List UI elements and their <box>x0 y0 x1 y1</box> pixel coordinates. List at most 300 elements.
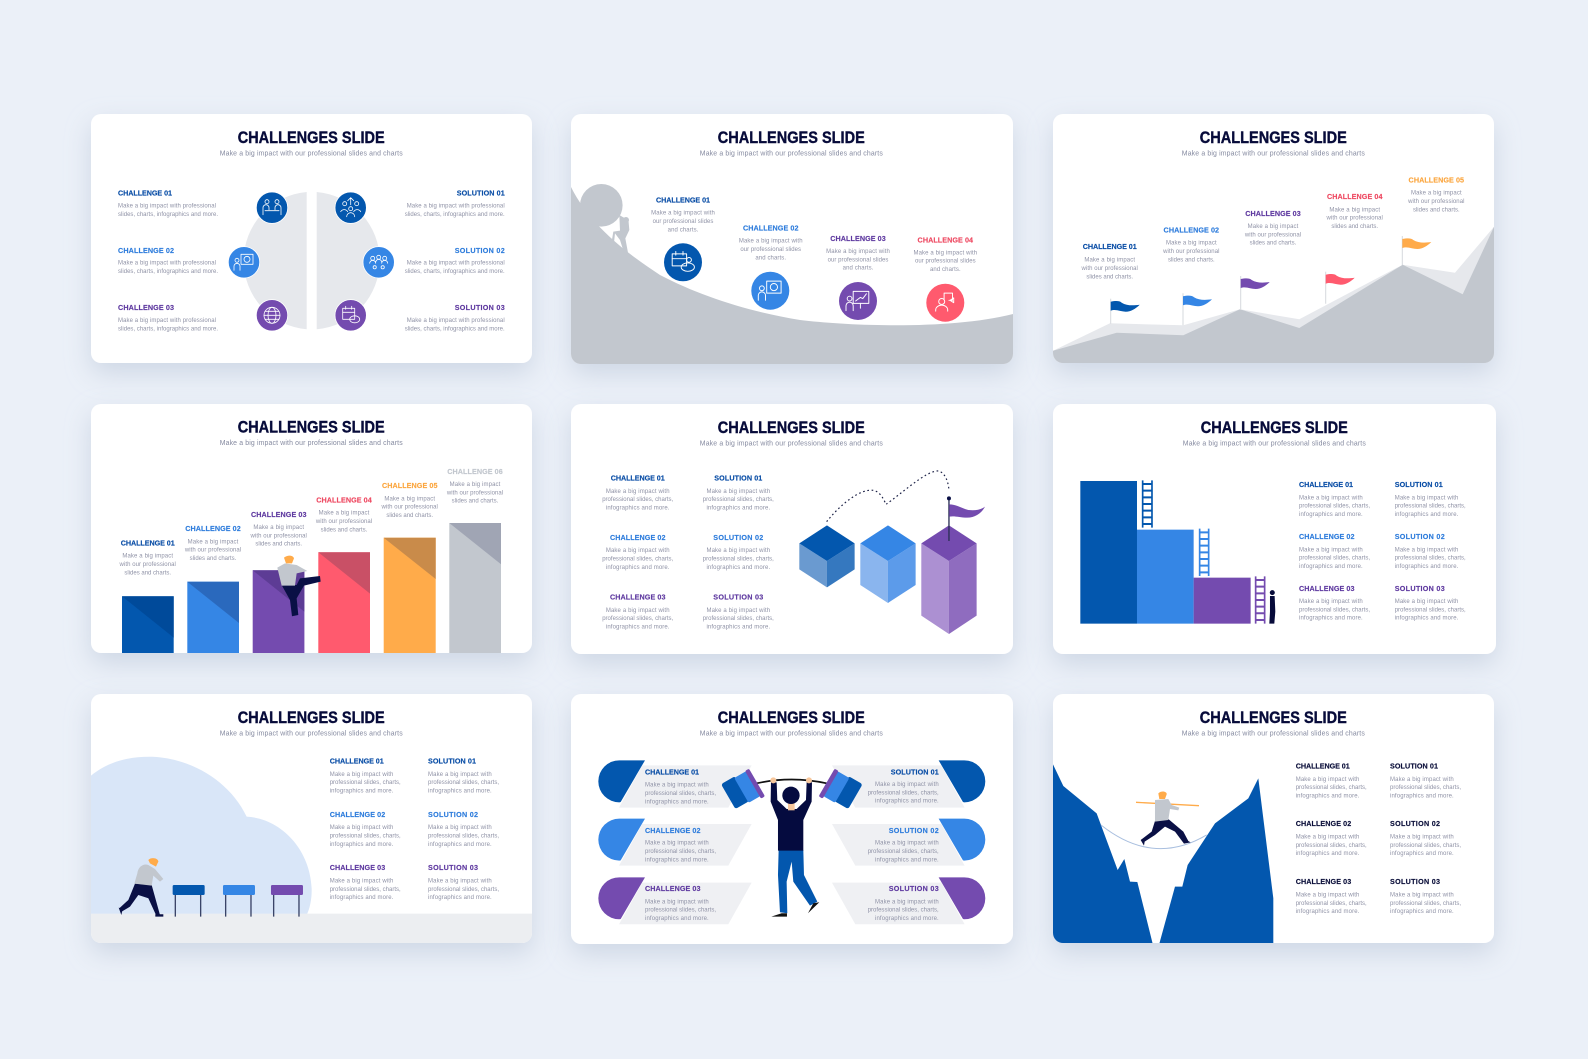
challenge 02 text: Make a big impact <box>1166 241 1217 247</box>
ladder 1 <box>1143 480 1152 528</box>
challenge 02 text: CHALLENGE 02 <box>330 810 385 819</box>
challenge 02 text <box>1296 819 1367 857</box>
solution 02 text: professional slides, charts, <box>868 849 939 855</box>
icon: partners <box>256 192 288 223</box>
challenge 03 text: Make a big impact <box>253 525 304 531</box>
grey ribbons <box>619 765 965 924</box>
blue badges <box>598 760 985 802</box>
solution 01 text: infographics and more. <box>1390 794 1454 800</box>
legs <box>778 850 817 913</box>
solution 02 text: SOLUTION 02 <box>1395 532 1445 541</box>
challenge 03 text: CHALLENGE 03 <box>330 863 385 872</box>
challenge 03 text: Make a big impact with professional <box>118 318 216 324</box>
challenge 01 text: CHALLENGE 01 <box>1296 761 1350 770</box>
solution 02 text <box>703 533 774 571</box>
challenge 02 text: professional slides, charts, <box>1296 843 1367 849</box>
challenge 01 text: slides, charts, infographics and more. <box>118 212 218 218</box>
solution 03 text: Make a big impact with <box>706 608 770 614</box>
challenge 03 text <box>1299 584 1370 622</box>
subtitle: Make a big impact with our professional slides and charts <box>1182 151 1365 158</box>
flag 5 <box>1402 236 1431 265</box>
barbell <box>721 769 863 809</box>
challenge 03 text: Make a big impact with <box>1299 599 1363 605</box>
hurdles scene <box>91 757 532 944</box>
solution 01 text: Make a big impact with <box>1390 777 1454 783</box>
solution 01 text: infographics and more. <box>428 788 492 794</box>
title: CHALLENGES SLIDE <box>1200 708 1347 727</box>
challenge 02 text: slides and charts. <box>190 556 237 562</box>
challenge 01 text: infographics and more. <box>645 799 709 805</box>
challenge 02 text <box>1162 226 1219 263</box>
solution 01 text: infographics and more. <box>1395 512 1459 518</box>
subtitle: Make a big impact with our professional slides and charts <box>220 731 403 738</box>
solution 02 text: Make a big impact with <box>875 841 939 847</box>
challenge 02 text: infographics and more. <box>1299 564 1363 570</box>
challenge 02 text: CHALLENGE 02 <box>1299 532 1354 541</box>
panel: slide 5 cubes <box>571 404 1013 654</box>
bar 2 <box>187 582 239 653</box>
solution 01 text: professional slides, charts, <box>703 497 774 503</box>
solution 01 text: professional slides, charts, <box>1390 785 1461 791</box>
title: CHALLENGES SLIDE <box>1201 418 1348 437</box>
challenge 01 text: Make a big impact with <box>330 772 393 778</box>
challenge 03 text <box>118 303 218 332</box>
solution 02 text: infographics and more. <box>1395 564 1459 570</box>
solution 01 text <box>868 768 939 805</box>
solution 01 text: professional slides, charts, <box>868 790 939 796</box>
challenge 03 text: professional slides, charts, <box>645 908 716 914</box>
split circle <box>244 192 380 329</box>
challenge 06 text: slides and charts. <box>452 499 499 505</box>
challenge 03 text: slides and charts. <box>255 542 302 548</box>
flag 2 <box>1183 293 1212 325</box>
challenge 03 text: professional slides, charts, <box>602 616 674 622</box>
challenge 05 text: with our professional <box>381 505 438 511</box>
solution 02 text <box>868 826 939 863</box>
solution 02 text: Make a big impact with <box>428 825 492 831</box>
challenge 04 text: slides and charts. <box>321 527 368 533</box>
icon: presenter with chart <box>839 282 877 320</box>
challenge 02 text: with our professional <box>1162 249 1219 255</box>
challenge 01 text: CHALLENGE 01 <box>1299 480 1353 489</box>
challenge 01 text: Make a big impact with <box>1296 777 1359 783</box>
solution 02 text: infographics and more. <box>875 857 939 863</box>
challenge 01 text: and charts. <box>668 227 699 233</box>
cube 3 <box>921 525 977 634</box>
challenge 03 text <box>602 592 674 630</box>
challenge 01 text: CHALLENGE 01 <box>656 196 710 205</box>
challenge 01 text: CHALLENGE 01 <box>645 767 699 776</box>
challenge 02 text: professional slides, charts, <box>330 834 401 840</box>
torso <box>771 782 812 851</box>
solution 03 text <box>1395 584 1466 622</box>
solution 02 text: SOLUTION 02 <box>428 810 478 819</box>
challenge 03 text: slides and charts. <box>1250 241 1297 247</box>
challenge 03 text <box>1244 209 1301 247</box>
bar 1 <box>122 596 174 653</box>
challenge 02 text: Make a big impact with <box>1299 547 1363 553</box>
challenge 01 text: professional slides, charts, <box>645 791 716 797</box>
challenge 01 text <box>1081 242 1138 280</box>
solution 02 text: professional slides, charts, <box>428 834 499 840</box>
icon: presentation <box>228 247 260 278</box>
challenge 02 text <box>645 826 716 863</box>
icon: presenter with clock <box>751 272 789 310</box>
challenge 04 text: our professional slides <box>915 259 976 265</box>
hurdle 1 <box>173 885 205 917</box>
solution 01 text: slides, charts, infographics and more. <box>405 212 505 218</box>
challenge 01 text: professional slides, charts, <box>1299 504 1370 510</box>
solution 03 text <box>405 303 505 332</box>
challenge 01 text: infographics and more. <box>606 506 670 512</box>
solution 03 text: SOLUTION 03 <box>428 863 478 872</box>
challenge 02 text: infographics and more. <box>1296 851 1360 857</box>
challenge 02 text: infographics and more. <box>330 842 394 848</box>
flag 4 <box>1326 272 1355 304</box>
solution 01 text: Make a big impact with <box>875 782 939 788</box>
panel: slide 7 hurdles <box>91 694 532 944</box>
panel: slide 8 weightlifter <box>571 694 1013 944</box>
challenge 01 text: slides and charts. <box>1086 274 1133 280</box>
solution 03 text: Make a big impact with <box>1395 599 1458 605</box>
solution 03 text: Make a big impact with <box>875 899 939 905</box>
challenge 02 text: Make a big impact <box>188 539 239 545</box>
challenge 03 text <box>1296 877 1367 915</box>
solution 01 text: SOLUTION 01 <box>1390 761 1438 770</box>
panel: slide 6 stairs and ladders <box>1053 404 1496 654</box>
challenge 01 text: Make a big impact with <box>606 489 670 495</box>
challenge 01 text: CHALLENGE 01 <box>118 189 172 198</box>
hurdle 2 <box>223 885 255 917</box>
solution 01 text: infographics and more. <box>706 506 770 512</box>
challenge 03 text: CHALLENGE 03 <box>1296 877 1351 886</box>
flag 1 <box>1111 299 1140 324</box>
mountain range <box>1053 227 1494 363</box>
purple badges <box>598 877 985 919</box>
challenge 01 text: CHALLENGE 01 <box>1083 242 1137 251</box>
challenge 02 text: CHALLENGE 02 <box>743 224 798 233</box>
subtitle: Make a big impact with our professional slides and charts <box>700 731 883 738</box>
challenge 02 text: slides and charts. <box>1168 257 1215 263</box>
challenge 03 text: and charts. <box>843 266 874 272</box>
challenge 02 text: Make a big impact with <box>606 548 670 554</box>
bar 4 <box>318 552 370 653</box>
solution 03 text: professional slides, charts, <box>703 616 774 622</box>
title: CHALLENGES SLIDE <box>238 418 385 436</box>
solution 02 text <box>405 246 505 275</box>
challenge 02 text: Make a big impact with <box>1296 834 1359 840</box>
solution 01 text: professional slides, charts, <box>428 780 499 786</box>
solution 02 text: SOLUTION 02 <box>455 246 505 255</box>
ladder 3 <box>1256 576 1265 624</box>
challenge 02 text: CHALLENGE 02 <box>1296 819 1351 828</box>
cloud backdrop <box>91 757 312 915</box>
solution 02 text: infographics and more. <box>428 842 492 848</box>
challenge 01 text <box>118 188 218 218</box>
solution 01 text <box>1395 480 1466 518</box>
challenge 01 text <box>1296 762 1367 800</box>
challenge 03 text <box>645 884 716 922</box>
icon: calendar chat <box>664 243 702 281</box>
panel: slide 1 challenges and solutions circle <box>91 114 532 363</box>
solution 02 text: Make a big impact with <box>706 548 770 554</box>
solution 03 text: professional slides, charts, <box>428 887 499 893</box>
challenge 02 text: professional slides, charts, <box>645 849 716 855</box>
solution 01 text <box>405 188 505 218</box>
title: CHALLENGES SLIDE <box>238 128 385 147</box>
solution 03 text: infographics and more. <box>706 624 770 630</box>
solution 03 text: SOLUTION 03 <box>455 303 505 312</box>
challenge 01 text: Make a big impact with <box>645 783 709 789</box>
challenge 02 text: our professional slides <box>740 247 801 253</box>
challenge 02 text: infographics and more. <box>606 565 670 571</box>
dashed jump path <box>827 471 949 522</box>
challenge 03 text <box>250 510 307 548</box>
challenge 03 text: Make a big impact <box>1248 224 1299 230</box>
challenge 03 text: CHALLENGE 03 <box>830 234 886 243</box>
row shapes <box>598 760 985 924</box>
solution 01 text <box>428 756 499 794</box>
challenge 02 text: Make a big impact with <box>330 825 393 831</box>
challenge 01 text: Make a big impact with professional <box>118 204 216 210</box>
challenge 01 text: CHALLENGE 01 <box>611 473 665 482</box>
challenge 02 text: CHALLENGE 02 <box>185 524 241 533</box>
challenge 06 text: with our professional <box>446 490 503 496</box>
challenge 05 text: slides and charts. <box>386 513 433 519</box>
cube 2 <box>860 525 916 603</box>
challenge 03 text: Make a big impact with <box>826 249 890 255</box>
solution 03 text: infographics and more. <box>1390 909 1454 915</box>
challenge 01 text: infographics and more. <box>1299 512 1363 518</box>
solution 03 text: slides, charts, infographics and more. <box>405 326 505 332</box>
weightlifter figure with barbell <box>721 769 863 917</box>
icon: globe <box>256 300 288 331</box>
challenge 01 text <box>651 196 715 233</box>
challenge 02 text: professional slides, charts, <box>602 557 674 563</box>
solution 03 text: Make a big impact with <box>428 878 492 884</box>
ground <box>91 914 532 944</box>
solution 02 text: professional slides, charts, <box>1390 843 1461 849</box>
solution 01 text: Make a big impact with <box>1395 495 1458 501</box>
challenge 06 text <box>446 467 503 505</box>
challenge 05 text: Make a big impact <box>1411 191 1462 197</box>
challenge 04 text: with our professional <box>1326 216 1383 222</box>
solution 01 text: Make a big impact with <box>428 772 492 778</box>
panel: slide 2 boulder on a slope <box>571 114 1013 364</box>
challenge 02 text: Make a big impact with <box>645 841 709 847</box>
challenge 02 text: and charts. <box>755 255 786 261</box>
title: CHALLENGES SLIDE <box>718 418 865 437</box>
challenge 03 text: CHALLENGE 03 <box>1299 584 1354 593</box>
solution 02 text: professional slides, charts, <box>1395 556 1466 562</box>
solution 01 text: SOLUTION 01 <box>714 473 762 482</box>
solution 03 text: infographics and more. <box>428 895 492 901</box>
challenge 01 text <box>645 768 716 805</box>
solution 03 text: SOLUTION 03 <box>1395 584 1445 593</box>
challenge 04 text <box>1326 192 1383 230</box>
balancing figure <box>1136 791 1199 846</box>
challenge 03 text: infographics and more. <box>606 624 670 630</box>
challenge 03 text: CHALLENGE 03 <box>118 303 174 312</box>
solution 03 text: Make a big impact with <box>1390 892 1454 898</box>
ladder 2 <box>1200 529 1209 576</box>
challenge 02 text: CHALLENGE 02 <box>610 533 665 542</box>
title: CHALLENGES SLIDE <box>718 128 865 147</box>
bar 5 <box>384 538 436 653</box>
challenge 03 text: with our professional <box>250 533 307 539</box>
solution 01 text: SOLUTION 01 <box>1395 480 1443 489</box>
solution 02 text <box>428 810 499 848</box>
icon: calendar chat <box>335 300 366 331</box>
challenge 04 text: Make a big impact <box>319 511 370 517</box>
challenge 04 text: CHALLENGE 04 <box>1327 192 1382 201</box>
solution 02 text <box>1395 532 1466 570</box>
challenge 03 text: Make a big impact with <box>645 899 709 905</box>
challenge 03 text: slides, charts, infographics and more. <box>118 326 218 332</box>
solution 02 text: slides, charts, infographics and more. <box>405 269 505 275</box>
subtitle: Make a big impact with our professional slides and charts <box>1183 441 1366 448</box>
challenge 05 text: CHALLENGE 05 <box>1409 176 1464 185</box>
challenge 01 text: Make a big impact <box>122 554 173 560</box>
icon: speaker <box>926 284 964 322</box>
challenge 03 text: CHALLENGE 03 <box>251 510 306 519</box>
challenge 03 text: Make a big impact with <box>330 878 393 884</box>
challenge 01 text: CHALLENGE 01 <box>330 756 384 765</box>
challenge 01 text <box>119 538 176 576</box>
challenge 01 text: infographics and more. <box>1296 794 1360 800</box>
challenge 02 text: CHALLENGE 02 <box>118 246 174 255</box>
challenge 03 text: infographics and more. <box>1296 909 1360 915</box>
challenge 02 text <box>1299 532 1370 570</box>
challenge 03 text: infographics and more. <box>645 916 709 922</box>
challenge 02 text: infographics and more. <box>645 857 709 863</box>
solution 03 text: Make a big impact with professional <box>407 318 505 324</box>
challenge 02 text <box>602 533 674 571</box>
person silhouette <box>1269 590 1275 624</box>
solution 01 text: professional slides, charts, <box>1395 504 1466 510</box>
challenge 05 text: Make a big impact <box>384 496 435 502</box>
challenge 02 text: CHALLENGE 02 <box>1164 226 1219 235</box>
challenge 04 text: with our professional <box>315 519 372 525</box>
challenge 01 text: professional slides, charts, <box>330 780 401 786</box>
solution 01 text: SOLUTION 01 <box>428 756 476 765</box>
challenge 02 text <box>118 246 218 275</box>
stairs and ladders <box>1080 480 1275 624</box>
challenge 03 text: professional slides, charts, <box>1299 607 1370 613</box>
solution 02 text: infographics and more. <box>706 565 770 571</box>
bar 3 <box>253 570 304 653</box>
title: CHALLENGES SLIDE <box>238 708 385 727</box>
challenge 02 text: Make a big impact with <box>739 239 803 245</box>
challenge 02 text <box>184 524 241 562</box>
solution 03 text <box>428 863 499 901</box>
shoes <box>771 902 819 917</box>
challenge 02 text <box>330 810 401 848</box>
solution 02 text: SOLUTION 02 <box>889 826 939 835</box>
challenge 05 text: slides and charts. <box>1413 207 1460 213</box>
solution 02 text: Make a big impact with <box>1390 834 1454 840</box>
solution 01 text: infographics and more. <box>875 799 939 805</box>
hurdle 3 <box>271 885 303 917</box>
challenge 02 text: slides, charts, infographics and more. <box>118 269 218 275</box>
challenge 03 text: professional slides, charts, <box>1296 901 1367 907</box>
challenge 04 text: and charts. <box>930 267 961 273</box>
challenge 04 text: CHALLENGE 04 <box>918 236 973 245</box>
challenge 01 text: Make a big impact <box>1084 258 1135 264</box>
challenge 02 text: with our professional <box>184 548 241 554</box>
challenge 01 text: with our professional <box>1081 266 1138 272</box>
tightrope <box>1101 825 1207 849</box>
challenge 06 text: CHALLENGE 06 <box>447 467 503 476</box>
solution 02 text: infographics and more. <box>1390 851 1454 857</box>
solution 03 text: SOLUTION 03 <box>1390 877 1440 886</box>
panel: slide 9 tightrope canyon <box>1053 694 1494 944</box>
icon: team growth <box>335 192 366 223</box>
solution 03 text: infographics and more. <box>1395 616 1459 622</box>
challenge 03 text: Make a big impact with <box>606 608 670 614</box>
solution 01 text: Make a big impact with professional <box>407 204 505 210</box>
challenge 03 text: infographics and more. <box>1299 616 1363 622</box>
purple flag <box>947 496 985 541</box>
challenge 01 text: with our professional <box>119 562 176 568</box>
challenge 05 text <box>1407 176 1464 213</box>
title: CHALLENGES SLIDE <box>718 708 865 727</box>
solution 03 text: professional slides, charts, <box>1395 607 1466 613</box>
solution 02 text: professional slides, charts, <box>703 557 774 563</box>
challenge 04 text: Make a big impact <box>1329 207 1380 213</box>
subtitle: Make a big impact with our professional slides and charts <box>220 151 403 158</box>
challenge 06 text: Make a big impact <box>450 482 501 488</box>
left cliff <box>1053 764 1153 944</box>
challenge 03 text: CHALLENGE 03 <box>610 592 665 601</box>
solution 03 text: SOLUTION 03 <box>889 884 939 893</box>
challenge 01 text <box>330 756 401 794</box>
solution 03 text: infographics and more. <box>875 916 939 922</box>
challenge 04 text <box>913 236 977 273</box>
solution 03 text <box>1390 877 1461 915</box>
challenge 03 text: CHALLENGE 03 <box>645 884 700 893</box>
subtitle: Make a big impact with our professional slides and charts <box>220 440 403 447</box>
right cliff <box>1159 778 1273 944</box>
solution 01 text <box>1390 762 1461 800</box>
challenge 01 text: slides and charts. <box>124 570 171 576</box>
title: CHALLENGES SLIDE <box>1200 128 1347 147</box>
challenge 03 text: Make a big impact with <box>1296 892 1359 898</box>
challenge 02 text <box>739 224 803 261</box>
challenge 01 text: Make a big impact with <box>1299 495 1363 501</box>
challenge 04 text <box>315 496 372 533</box>
boulder <box>580 184 623 227</box>
challenge 05 text <box>381 481 438 519</box>
subtitle: Make a big impact with our professional slides and charts <box>700 441 883 448</box>
panel: slide 3 mountain flags <box>1053 114 1494 363</box>
solution 01 text <box>703 474 774 512</box>
challenge 04 text: slides and charts. <box>1331 224 1378 230</box>
solution 03 text <box>868 884 939 922</box>
challenge 01 text: our professional slides <box>653 219 713 225</box>
cube 1 <box>799 525 855 587</box>
solution 02 text: SOLUTION 02 <box>1390 819 1440 828</box>
solution 01 text: SOLUTION 01 <box>457 189 505 198</box>
isometric cubes with flag <box>799 471 985 634</box>
canyon scene <box>1053 764 1273 944</box>
challenge 03 text <box>826 234 890 272</box>
challenge 04 text: Make a big impact with <box>913 250 977 256</box>
challenge 05 text: with our professional <box>1407 199 1464 205</box>
challenge 01 text <box>602 474 674 512</box>
running figure <box>119 858 163 917</box>
subtitle: Make a big impact with our professional slides and charts <box>700 151 883 158</box>
